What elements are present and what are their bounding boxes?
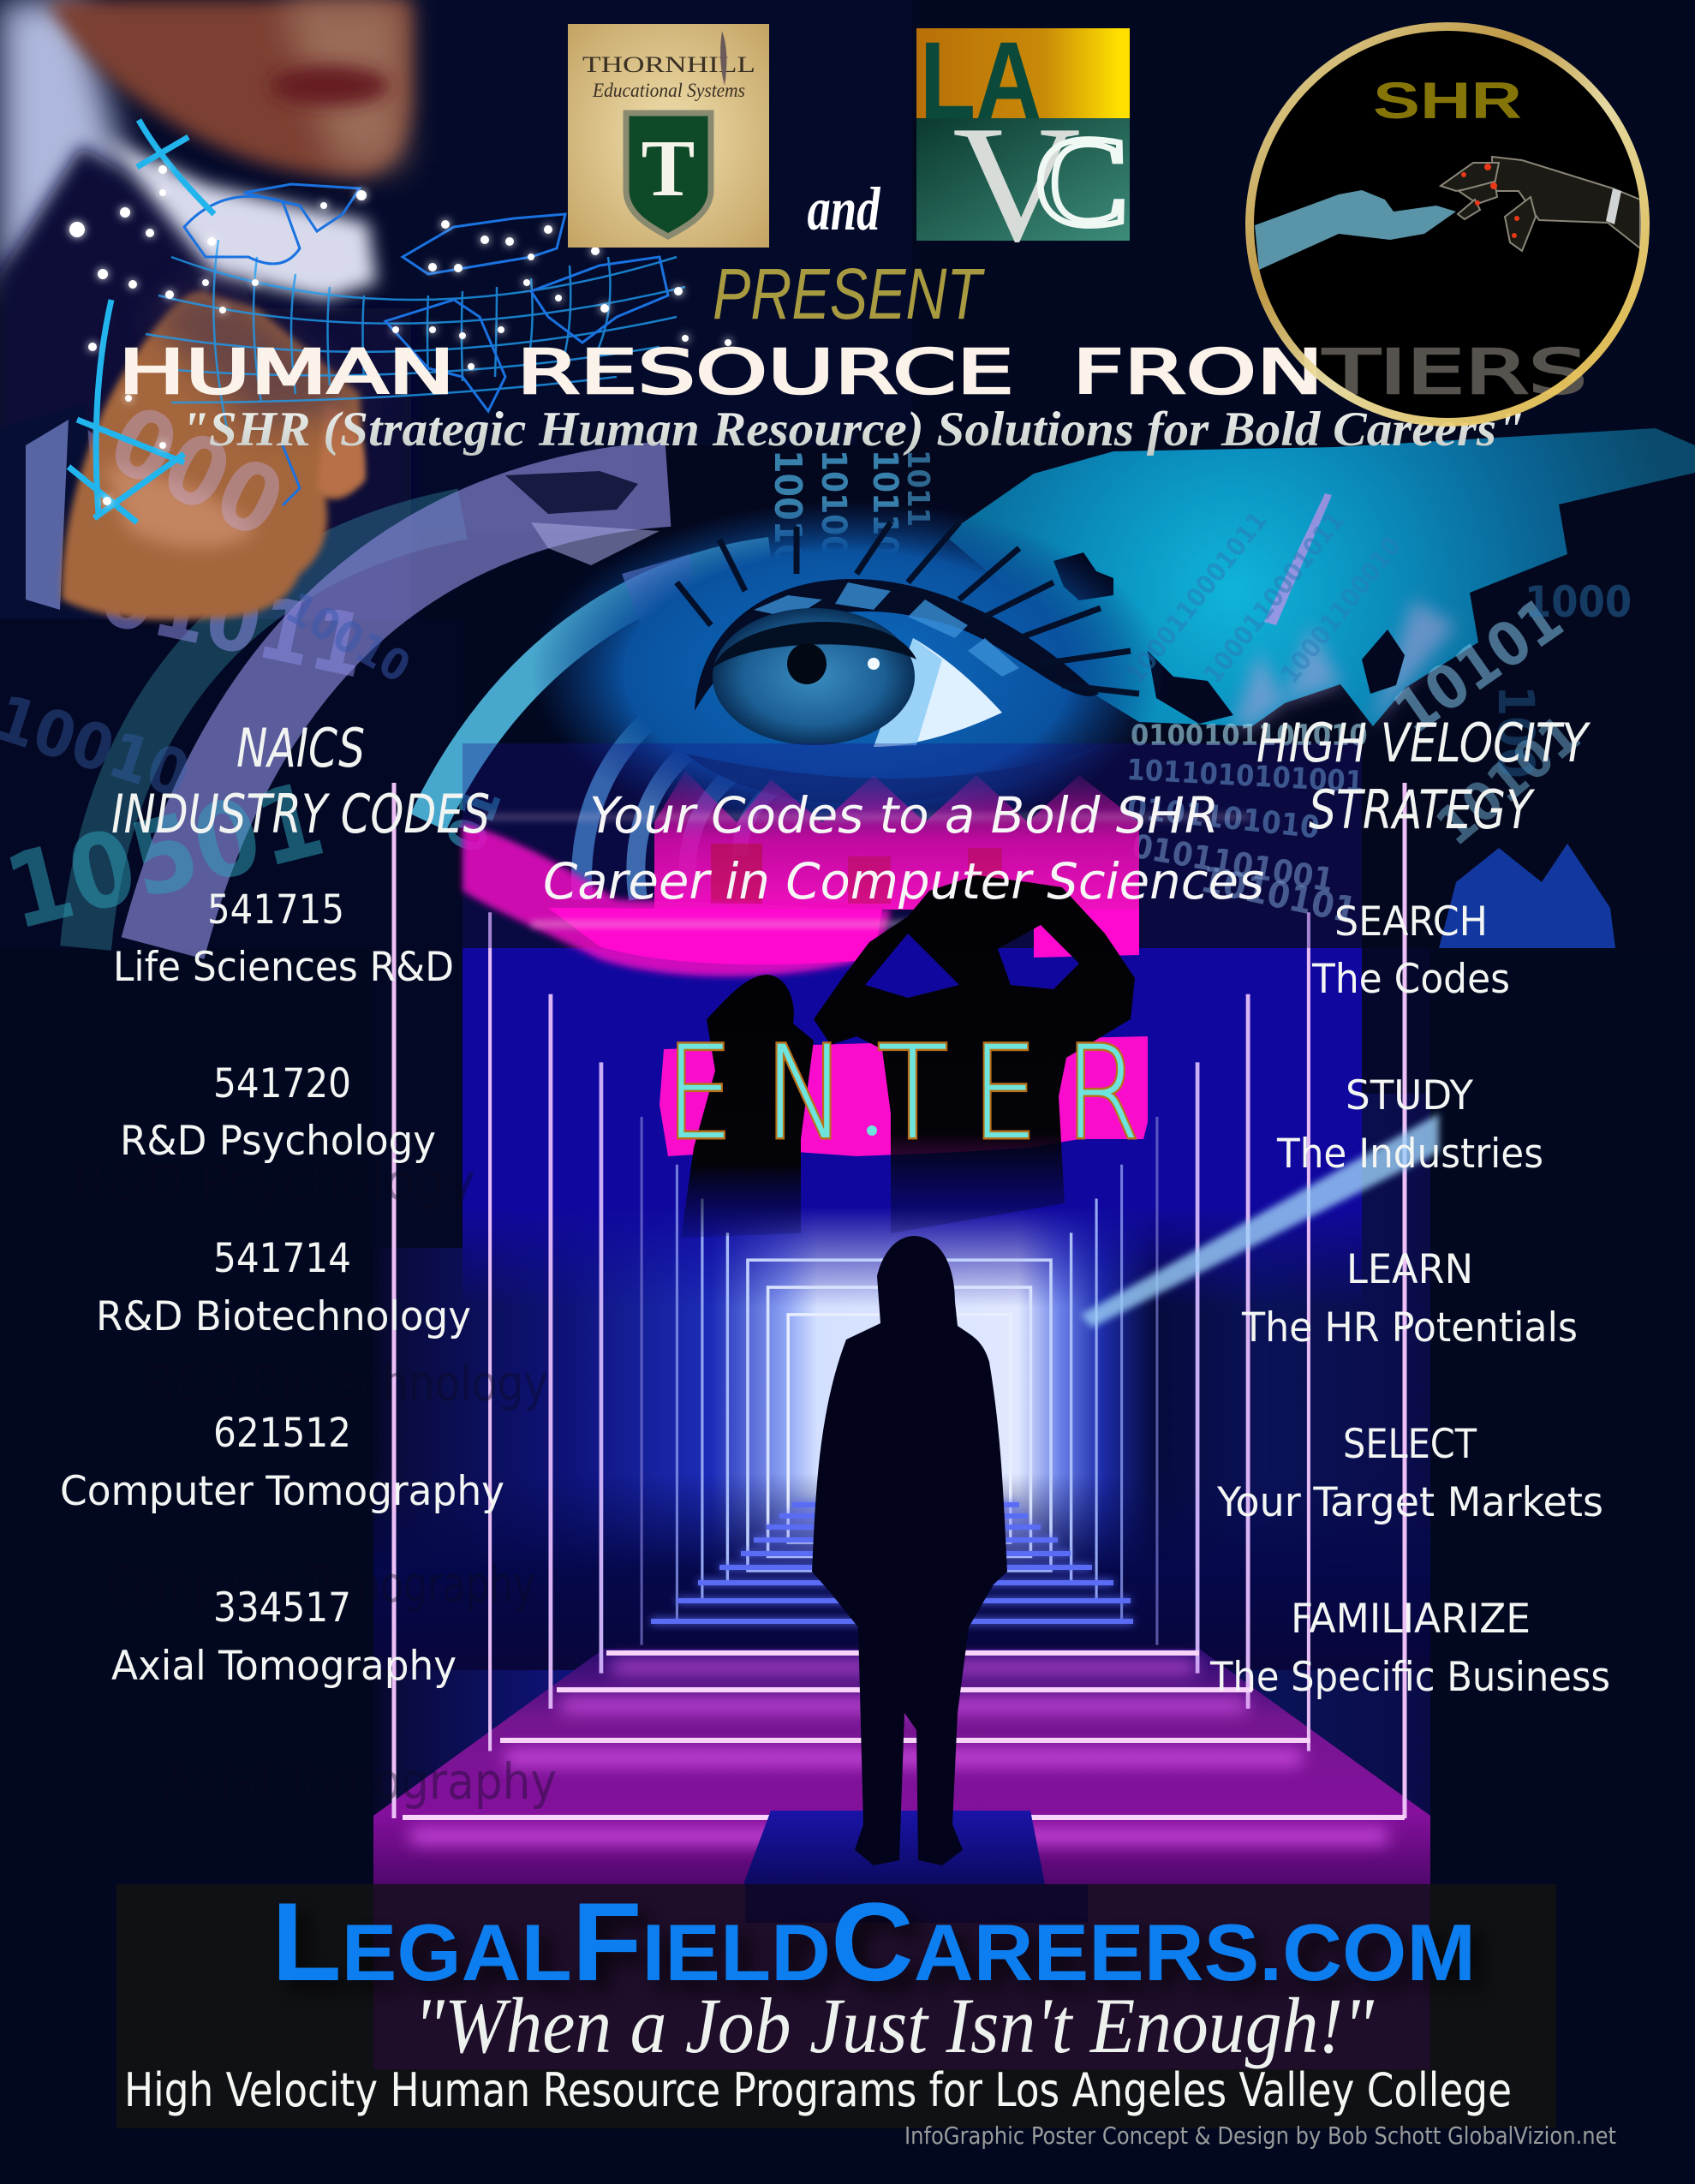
- logo: Thornhill Educational Systems: THORNHILL: [582, 52, 755, 77]
- illustration: pink paint splash: [463, 743, 1362, 976]
- title: TIERS: [1322, 337, 1587, 408]
- logo: Thornhill Educational Systems: T: [642, 124, 695, 213]
- list: NAICS codes: 541715: [207, 886, 344, 934]
- list: strategy steps: SEARCH: [1334, 898, 1488, 946]
- heading: high velocity strategy: HIGH VELOCITY: [1256, 712, 1591, 774]
- text: credit: InfoGraphic Poster Concept & Design by Bob Schott GlobalVizion.net: [904, 2121, 1616, 2150]
- panel: binary digits and fingerprint arcs: 1000110001011: [1121, 506, 1274, 689]
- list: NAICS codes: 541720: [213, 1060, 351, 1107]
- list: strategy steps: SELECT: [1343, 1421, 1477, 1468]
- illustration: periwinkle digits on hand: 000: [93, 384, 300, 560]
- illustration: performers silhouette: [681, 875, 1135, 1238]
- faint shadow text: R&D Psychology: [73, 1153, 475, 1211]
- logo: SHR circle: SHR: [1373, 72, 1522, 129]
- heading: career headline: Your Codes to a Bold SHR: [589, 786, 1219, 844]
- blue floor steps: [651, 1505, 1133, 1621]
- panel: binary digits and fingerprint arcs: 100: [1487, 685, 1545, 779]
- sign: ENTER neon: R: [1065, 1019, 1140, 1168]
- neon floor lines: [403, 1653, 1405, 1817]
- list: strategy steps: [1209, 898, 1610, 1701]
- sign: ENTER neon: E: [665, 1019, 733, 1168]
- text: and: and: [807, 175, 880, 243]
- sign: ENTER neon: E: [972, 1019, 1037, 1168]
- logo: SHR circle: [1250, 27, 1645, 422]
- panel: binary digits and fingerprint arcs: 1010101: [1197, 858, 1360, 932]
- tunnel lower floor: [373, 1473, 1430, 1670]
- sign: ENTER neon: N: [764, 1019, 846, 1168]
- heading: career headline: Career in Computer Sciences: [543, 852, 1264, 910]
- logo: Thornhill Educational Systems: Educational Systems: [592, 80, 745, 101]
- heading: PRESENT: PRESENT: [713, 254, 985, 334]
- list: strategy steps: FAMILIARIZE: [1291, 1596, 1531, 1643]
- list: NAICS codes: Life Sciences R&D: [113, 944, 454, 991]
- tunnel purple floor: [373, 1649, 1430, 1884]
- illustration: pointing hand: [0, 284, 377, 620]
- sign: ENTER neon: E: [665, 1019, 733, 1168]
- panel: binary digits and fingerprint arcs: 1011: [900, 450, 935, 527]
- panel: binary digits and fingerprint arcs: 1000: [1525, 577, 1632, 627]
- silhouette figure: [812, 1236, 1007, 1865]
- logo: LAVC: C: [1035, 110, 1129, 253]
- illustration: magenta ENTER backdrop: [659, 1036, 1148, 1156]
- panel: binary digits and fingerprint arcs: 7: [2, 395, 134, 541]
- heading: NAICS industry codes: NAICS: [236, 717, 365, 779]
- text: programs line: High Velocity Human Resource Programs for Los Angeles Valley College: [124, 2063, 1512, 2117]
- faint shadow text: [73, 1153, 557, 1811]
- sign: ENTER neon: E: [972, 1019, 1037, 1168]
- panel: binary digits and fingerprint arcs: 1011010101001: [1126, 753, 1364, 799]
- illustration: eye: [531, 501, 1165, 844]
- logo: Thornhill Educational Systems: [568, 24, 769, 248]
- panel: binary digits and fingerprint arcs: 01: [435, 780, 514, 861]
- title: [118, 337, 1587, 408]
- website title: LEGALFIELDCAREERS.COM: [283, 1889, 1487, 2014]
- panel: teal world map: [856, 428, 1695, 948]
- panel: binary digits and fingerprint arcs: 0101101001: [1129, 827, 1336, 899]
- faint shadow text: Axial Tomography: [163, 1752, 557, 1811]
- panel: binary digits and fingerprint arcs: [0, 395, 1632, 953]
- logo: LAVC: LA: [920, 20, 1041, 142]
- panel: binary digits and fingerprint arcs: 0100101101010: [1131, 719, 1368, 753]
- heading: NAICS industry codes: [111, 717, 490, 845]
- illustration: glowing globe network: [69, 120, 731, 522]
- title: FRON: [1072, 337, 1323, 408]
- list: NAICS codes: 541714: [213, 1235, 351, 1282]
- logo: LAVC: V: [952, 92, 1081, 277]
- heading: high velocity strategy: STRATEGY: [1309, 779, 1536, 841]
- list: strategy steps: STUDY: [1346, 1072, 1473, 1119]
- panel: binary digits and fingerprint arcs: 10010: [278, 582, 419, 693]
- heading: career headline: [543, 786, 1264, 910]
- neon floor glow: [411, 1662, 1388, 1843]
- list: NAICS codes: Axial Tomography: [111, 1643, 457, 1690]
- logo: SHR gold ring: [1250, 27, 1645, 422]
- panel: neon tunnel photo: [373, 783, 1439, 1884]
- pedestal: [743, 1811, 1045, 1884]
- sign: ENTER neon: R: [1065, 1019, 1140, 1168]
- list: strategy steps: The Industries: [1276, 1131, 1543, 1178]
- title: RESOURCE: [516, 337, 1014, 408]
- tagline: "When a Job Just Isn't Enough!": [414, 1982, 1374, 2069]
- list: NAICS codes: Computer Tomography: [60, 1468, 504, 1515]
- faint shadow text: Computer Tomography: [107, 1555, 535, 1614]
- list: strategy steps: LEARN: [1346, 1246, 1473, 1293]
- title: HUMAN: [118, 337, 455, 408]
- list: strategy steps: The Codes: [1311, 956, 1510, 1003]
- panel: binary digits and fingerprint arcs: 10101: [1424, 703, 1591, 857]
- faint shadow text: R&D Biotechnology: [146, 1354, 548, 1412]
- list: NAICS codes: R&D Psychology: [120, 1118, 436, 1165]
- panel: binary digits and fingerprint arcs: 10010: [766, 450, 809, 568]
- subtitle: "SHR (Strategic Human Resource) Solutions for Bold Careers": [181, 403, 1525, 456]
- list: NAICS codes: 621512: [213, 1410, 351, 1457]
- panel: binary digits and fingerprint arcs: 10501: [0, 760, 335, 953]
- sign: ENTER neon: T: [877, 1019, 948, 1168]
- panel: binary digits and fingerprint arcs: 10110: [865, 450, 904, 557]
- heading: high velocity strategy: [1256, 712, 1591, 841]
- panel: binary digits and fingerprint arcs: 10001100010: [1275, 532, 1407, 689]
- heading: NAICS industry codes: INDUSTRY CODES: [111, 783, 490, 845]
- website title: LEGALFIELDCAREERS.COM: [272, 1879, 1476, 2004]
- logo: LAVC: [916, 20, 1130, 277]
- list: strategy steps: Your Target Markets: [1216, 1479, 1603, 1526]
- panel: businessman photo: [0, 0, 912, 651]
- list: NAICS codes: 334517: [213, 1584, 351, 1632]
- streak of light: [1081, 1113, 1439, 1328]
- panel: footer band: [116, 1884, 1556, 2128]
- sign: ENTER neon: [665, 1019, 1140, 1168]
- list: NAICS codes: R&D Biotechnology: [96, 1293, 471, 1340]
- panel: binary digits and fingerprint arcs: 1000110001011: [1198, 506, 1351, 689]
- list: NAICS codes: [60, 886, 504, 1690]
- panel: binary digits and fingerprint arcs: 10100: [814, 450, 853, 557]
- panel: binary digits and fingerprint arcs: 0101101010: [1125, 791, 1321, 846]
- sign: ENTER neon: T: [877, 1019, 948, 1168]
- sign: ENTER neon: N: [764, 1019, 846, 1168]
- list: strategy steps: The Specific Business: [1209, 1654, 1610, 1701]
- panel: binary digits and fingerprint arcs: 10101: [1382, 583, 1575, 749]
- list: strategy steps: The HR Potentials: [1241, 1304, 1578, 1352]
